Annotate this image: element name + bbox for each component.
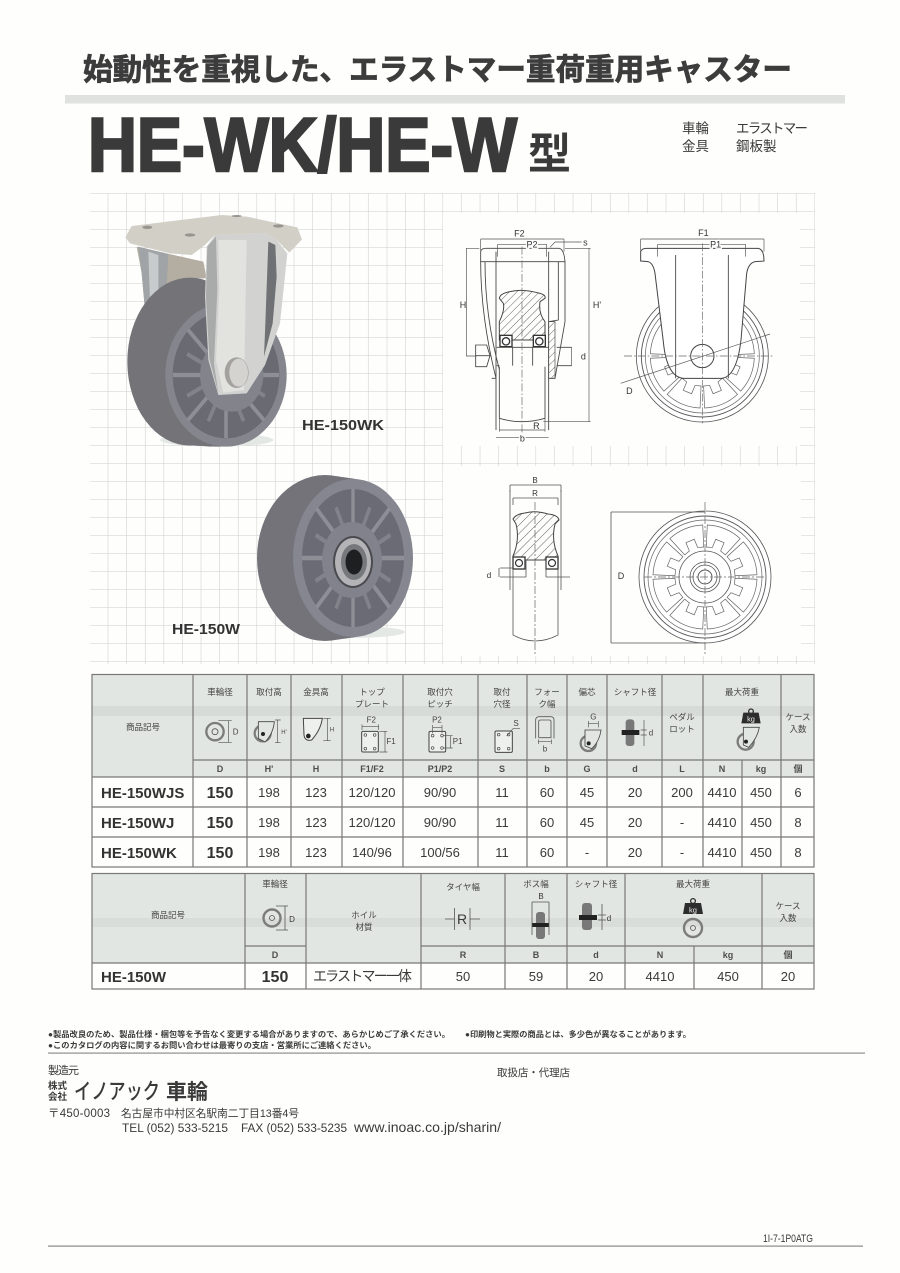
header labels: ク幅 bbox=[538, 699, 556, 709]
header labels: トップ bbox=[359, 687, 385, 697]
icon: fork width: b bbox=[543, 745, 548, 754]
model heading: HE-WK/HE-W bbox=[88, 103, 517, 188]
header labels: 材質 bbox=[355, 922, 373, 932]
address: FAX (052) 533-5235 bbox=[241, 1123, 347, 1135]
icon: hole pitch: P2 bbox=[432, 716, 442, 725]
notes: ●製品改良のため、製品仕様・梱包等を予告なく変更する場合がありますので、あらかじめご了承ください。 bbox=[48, 1029, 450, 1039]
address: www.inoac.co.jp/sharin/ bbox=[353, 1119, 501, 1135]
icon: wheel diameter: D bbox=[289, 915, 295, 924]
sub header: H bbox=[313, 764, 319, 774]
grid panel bbox=[90, 193, 815, 664]
row: HE-150WJS: 45 bbox=[580, 785, 594, 800]
header labels bbox=[151, 879, 801, 932]
icon: offset: G bbox=[590, 712, 596, 721]
row: HE-150WJS: 6 bbox=[794, 785, 802, 800]
row: HE-150WJS: 123 bbox=[305, 785, 327, 800]
tire bbox=[127, 278, 287, 447]
sub header: d bbox=[593, 950, 599, 960]
icon: mounting height bbox=[255, 720, 287, 743]
header labels: ボス幅 bbox=[523, 879, 549, 889]
manufacturer: 車輪 bbox=[166, 1081, 208, 1104]
row: HE-150WJS: HE-150WJS bbox=[101, 785, 184, 802]
header labels: 取付高 bbox=[256, 687, 282, 697]
manufacturer: 株式 bbox=[48, 1080, 67, 1092]
manufacturer bbox=[48, 1063, 208, 1104]
row: HE-150WK: 450 bbox=[750, 845, 772, 860]
header labels: 偏芯 bbox=[578, 687, 596, 697]
photo: HE-150WK caster bbox=[125, 215, 302, 447]
row: HE-150WJ: 90/90 bbox=[424, 815, 456, 830]
icon: fork width bbox=[536, 717, 554, 754]
row: HE-150WJS: 120/120 bbox=[348, 785, 396, 800]
photo: HE-150W wheel bbox=[257, 475, 413, 641]
row: HE-150WJS: 60 bbox=[540, 785, 554, 800]
dimensions: F2 bbox=[514, 229, 525, 239]
dimension D: D bbox=[618, 571, 625, 581]
header labels: 入数 bbox=[789, 724, 807, 734]
bottom line bbox=[48, 1246, 863, 1247]
row: HE-150W: エラストマー一体 bbox=[313, 968, 412, 984]
address bbox=[48, 1106, 501, 1135]
sub header: b bbox=[544, 764, 550, 774]
dimensions: B bbox=[532, 476, 538, 485]
dealer label: 取扱店・代理店 bbox=[497, 1066, 570, 1079]
row: HE-150WJS: 11 bbox=[495, 785, 509, 800]
icon: mounting hole: S bbox=[513, 719, 519, 728]
dimensions bbox=[487, 476, 561, 580]
row: HE-150WK: 11 bbox=[495, 845, 509, 860]
header labels: フォー bbox=[534, 687, 560, 697]
header labels: タイヤ幅 bbox=[446, 882, 480, 892]
icon: shaft diameter bbox=[579, 903, 611, 930]
header labels: 商品記号 bbox=[126, 722, 160, 732]
row: HE-150WJ: 20 bbox=[628, 815, 642, 830]
sub header: F1/F2 bbox=[360, 764, 384, 774]
dimensions: s bbox=[583, 238, 588, 248]
material spec bbox=[682, 121, 808, 154]
header labels: 最大荷重 bbox=[676, 879, 710, 889]
row: HE-150W: HE-150W bbox=[101, 969, 167, 986]
table: HE-150WJS / WJ / WK bbox=[92, 674, 814, 867]
dimensions: P1 bbox=[710, 239, 721, 249]
row: HE-150WK: HE-150WK bbox=[101, 845, 177, 862]
title: 始動性を重視した、エラストマー重荷重用キャスター bbox=[83, 54, 792, 87]
notes: ●印刷物と実際の商品とは、多少色が異なることがあります。 bbox=[465, 1029, 691, 1039]
row: HE-150WK bbox=[101, 845, 802, 862]
icon: wheel diameter bbox=[206, 721, 239, 742]
dimensions: D bbox=[626, 386, 633, 396]
row: HE-150WK: 60 bbox=[540, 845, 554, 860]
icon: shaft diameter: d bbox=[607, 914, 611, 923]
address: TEL (052) 533-5215 bbox=[122, 1123, 228, 1135]
dimensions: H' bbox=[593, 300, 601, 310]
sub header: B bbox=[533, 950, 540, 960]
manufacturer: 会社 bbox=[48, 1091, 67, 1103]
material spec: 金具 bbox=[682, 139, 709, 154]
header labels: ケース bbox=[775, 901, 801, 911]
header labels: ロット bbox=[669, 724, 695, 734]
row: HE-150WJ: 8 bbox=[794, 815, 802, 830]
row: HE-150WJ: HE-150WJ bbox=[101, 815, 174, 832]
header labels bbox=[126, 687, 811, 734]
icon: top plate bbox=[362, 716, 396, 752]
sub header bbox=[272, 949, 793, 960]
catalog code: 1I-7-1P0ATG bbox=[763, 1233, 813, 1245]
row: HE-150WK: 100/56 bbox=[420, 845, 460, 860]
model heading: 型 bbox=[528, 131, 571, 179]
row: HE-150WJS: 4410 bbox=[708, 785, 736, 800]
icon: boss width bbox=[532, 892, 549, 939]
row: HE-150WJ: 45 bbox=[580, 815, 594, 830]
dimensions bbox=[460, 229, 601, 444]
row: HE-150WJ: 450 bbox=[750, 815, 772, 830]
manufacturer: イノアック bbox=[74, 1079, 160, 1104]
dimensions: H bbox=[460, 300, 466, 310]
sub header: 個 bbox=[783, 949, 793, 960]
material spec: 鋼板製 bbox=[736, 139, 776, 154]
header icons left bbox=[206, 716, 463, 752]
dimensions: b bbox=[520, 434, 525, 444]
sub header: S bbox=[499, 764, 505, 774]
icon: offset bbox=[581, 712, 601, 751]
icon: shaft diameter: d bbox=[649, 728, 653, 737]
dimension D bbox=[611, 512, 705, 643]
footer divider bbox=[48, 1052, 865, 1054]
icon: wheel diameter: D bbox=[233, 728, 239, 737]
dimensions: R bbox=[533, 421, 540, 431]
icon: mounting height: H' bbox=[281, 730, 287, 736]
sub header: 個 bbox=[793, 763, 803, 774]
notes bbox=[48, 1029, 691, 1050]
icon: tire width: R bbox=[457, 911, 467, 927]
row: HE-150W: 150 bbox=[262, 969, 288, 986]
manufacturer: 製造元 bbox=[48, 1063, 79, 1077]
drawing: wheel section bbox=[487, 476, 570, 655]
icon: top plate: F1 bbox=[386, 737, 396, 746]
row: HE-150WJS: 90/90 bbox=[424, 785, 456, 800]
sub header: kg bbox=[723, 950, 733, 960]
row: HE-150WK: 20 bbox=[628, 845, 642, 860]
material spec: 車輪 bbox=[682, 121, 710, 136]
row: HE-150W: 450 bbox=[717, 969, 739, 984]
header labels: シャフト径 bbox=[575, 879, 618, 889]
header labels: 入数 bbox=[779, 913, 797, 923]
dimensions bbox=[626, 228, 764, 396]
sub header: kg bbox=[756, 764, 766, 774]
notes: ●このカタログの内容に関するお問い合わせは最寄りの支店・営業所にご連絡ください。 bbox=[48, 1040, 376, 1050]
label: HE-150WK: HE-150WK bbox=[302, 418, 385, 434]
table: HE-150W bbox=[92, 874, 814, 989]
row: HE-150W: 4410 bbox=[646, 969, 674, 984]
row: HE-150WJ: 123 bbox=[305, 815, 327, 830]
row: HE-150WJ: 4410 bbox=[708, 815, 736, 830]
row: HE-150WJS: 20 bbox=[628, 785, 642, 800]
icon: max load: kg bbox=[747, 714, 755, 723]
sub header: N bbox=[657, 950, 663, 960]
header labels: 金具高 bbox=[303, 687, 329, 697]
drawing: fixed caster side section bbox=[460, 229, 601, 444]
sub header: D bbox=[217, 764, 224, 774]
front fork leg bbox=[205, 233, 287, 395]
dimensions: d bbox=[581, 351, 586, 361]
sub header: N bbox=[719, 764, 725, 774]
row: HE-150WJS bbox=[101, 785, 802, 802]
material spec: エラストマー bbox=[736, 121, 808, 136]
row: HE-150WK: 8 bbox=[794, 845, 802, 860]
header labels: ペダル bbox=[669, 712, 695, 722]
row: HE-150WK: 140/96 bbox=[352, 845, 392, 860]
dimensions: R bbox=[532, 489, 538, 498]
header labels: シャフト径 bbox=[614, 687, 657, 697]
title band bbox=[65, 95, 845, 104]
row: HE-150WJ: 120/120 bbox=[348, 815, 396, 830]
icon: top plate: F2 bbox=[367, 716, 377, 725]
row: HE-150WJS: 150 bbox=[207, 785, 233, 802]
icon: bracket height bbox=[303, 718, 334, 741]
row: HE-150WJ: 11 bbox=[495, 815, 509, 830]
header labels: 穴径 bbox=[493, 699, 511, 709]
header labels: 取付 bbox=[493, 687, 511, 697]
sub header bbox=[217, 763, 803, 774]
icon: tire width bbox=[445, 908, 480, 930]
label: HE-150W: HE-150W bbox=[172, 622, 240, 638]
icon: mounting hole bbox=[495, 719, 520, 752]
row: HE-150WJ: 150 bbox=[207, 815, 233, 832]
axle bolt bbox=[225, 357, 249, 388]
rear fork leg bbox=[137, 247, 207, 310]
row: HE-150WJS: 200 bbox=[671, 785, 693, 800]
dimensions: F1 bbox=[698, 228, 709, 238]
dimensions: d bbox=[487, 571, 491, 580]
top plate bbox=[125, 215, 302, 255]
row: HE-150W bbox=[101, 968, 795, 986]
header labels: 取付穴 bbox=[427, 687, 453, 697]
row: HE-150W: 50 bbox=[456, 969, 470, 984]
row: HE-150W: 20 bbox=[781, 969, 795, 984]
icon: hole pitch bbox=[429, 716, 463, 752]
row: HE-150WJ: 198 bbox=[258, 815, 280, 830]
row: HE-150WJS: 198 bbox=[258, 785, 280, 800]
sub header: L bbox=[679, 764, 685, 774]
address: 名古屋市中村区名駅南二丁目13番4号 bbox=[121, 1106, 299, 1120]
header labels: 車輪径 bbox=[207, 687, 233, 697]
icon: max load bbox=[738, 709, 761, 750]
address: 〒450-0003 bbox=[48, 1108, 110, 1120]
header labels: 車輪径 bbox=[262, 879, 288, 889]
row: HE-150WK: 4410 bbox=[708, 845, 736, 860]
sub header: R bbox=[460, 950, 467, 960]
icon: max load: kg bbox=[689, 906, 697, 914]
row: HE-150WJ: - bbox=[680, 815, 684, 830]
header labels: ホイル bbox=[351, 910, 377, 920]
row: HE-150WJS: 450 bbox=[750, 785, 772, 800]
icon: shaft diameter bbox=[622, 719, 653, 746]
header labels: プレート bbox=[355, 699, 389, 709]
drawing: wheel front view bbox=[611, 502, 771, 654]
row: HE-150W: 59 bbox=[529, 969, 543, 984]
header icons right bbox=[495, 709, 761, 754]
sub header: G bbox=[583, 764, 591, 774]
sub header: H' bbox=[265, 764, 273, 774]
row: HE-150W: 20 bbox=[589, 969, 603, 984]
dimensions: P2 bbox=[526, 239, 537, 249]
row: HE-150WJ: 60 bbox=[540, 815, 554, 830]
header labels: ケース bbox=[785, 712, 811, 722]
header labels: 商品記号 bbox=[151, 910, 185, 920]
sub header: P1/P2 bbox=[428, 764, 452, 774]
sub header: d bbox=[632, 764, 638, 774]
row: HE-150WK: 198 bbox=[258, 845, 280, 860]
icon: wheel diameter bbox=[264, 906, 295, 930]
header labels: ピッチ bbox=[427, 699, 453, 709]
row: HE-150WK: - bbox=[680, 845, 684, 860]
sub header: D bbox=[272, 950, 279, 960]
row: HE-150WK: - bbox=[585, 845, 589, 860]
row: HE-150WK: 123 bbox=[305, 845, 327, 860]
drawing: fixed caster front view bbox=[621, 228, 774, 423]
header labels: 最大荷重 bbox=[725, 687, 759, 697]
icon: hole pitch: P1 bbox=[453, 737, 463, 746]
row: HE-150WK: 150 bbox=[207, 845, 233, 862]
row: HE-150WJ bbox=[101, 815, 802, 832]
icon: boss width: B bbox=[538, 892, 544, 901]
icon: max load bbox=[683, 899, 703, 937]
icon: bracket height: H bbox=[330, 728, 334, 734]
